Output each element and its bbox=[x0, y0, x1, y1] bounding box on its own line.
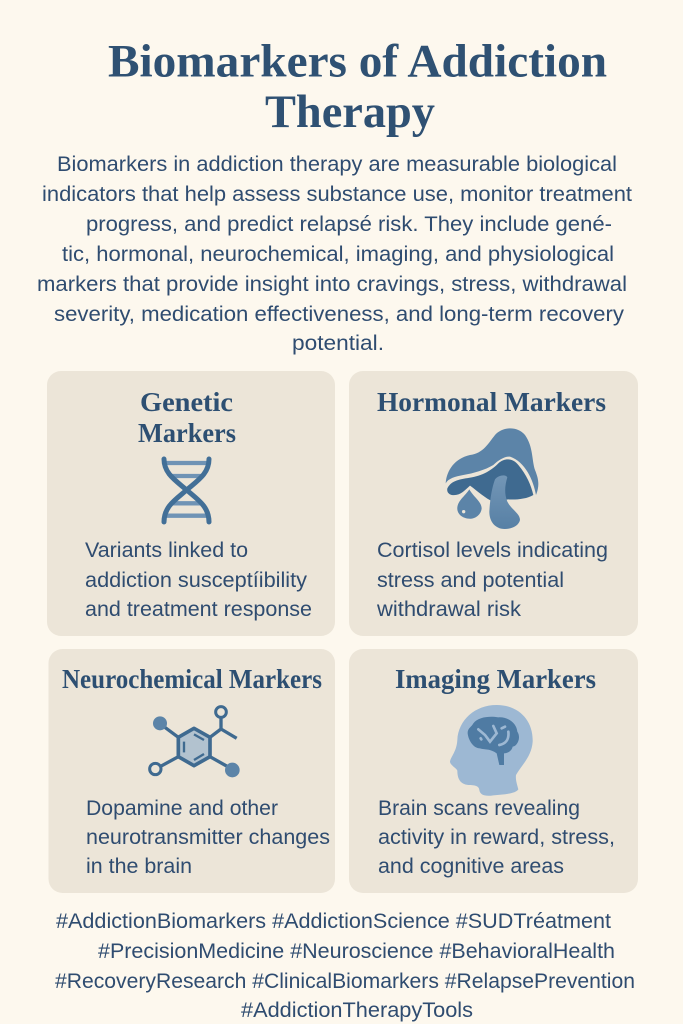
hashtags: #AddictionTherapyTools bbox=[241, 999, 473, 1022]
title: Therapy bbox=[265, 86, 435, 138]
text: imaging description bbox=[378, 797, 615, 878]
intro paragraph: Biomarkers in addiction therapy are measurable biological bbox=[57, 153, 617, 176]
intro paragraph: potential. bbox=[292, 332, 384, 355]
heading: hormonal markers: Hormonal Markers bbox=[377, 387, 606, 417]
title: Biomarkers of Addiction bbox=[108, 36, 607, 88]
text: neurochemical description: Dopamine and other bbox=[86, 797, 278, 820]
icon: head with brain bbox=[450, 705, 533, 796]
text: imaging description: Brain scans revealing bbox=[378, 797, 580, 820]
icon: dna helix bbox=[164, 459, 209, 522]
heading: genetic markers: Markers bbox=[138, 418, 236, 448]
panel: imaging markers bbox=[349, 649, 638, 893]
intro paragraph: indicators that help assess substance use, monitor treatment bbox=[42, 183, 632, 206]
text: genetic description: Variants linked to bbox=[85, 539, 248, 562]
intro paragraph: tic, hormonal, neurochemical, imaging, and physiological bbox=[62, 243, 614, 266]
text: imaging description: and cognitive areas bbox=[378, 855, 564, 878]
intro paragraph: markers that provide insight into cravings, stress, withdrawal bbox=[37, 273, 627, 296]
intro paragraph: severity, medication effectiveness, and long-term recovery bbox=[54, 303, 625, 326]
hashtags: #AddictionBiomarkers #AddictionScience #SUDTréatment bbox=[56, 910, 611, 933]
text: neurochemical description: neurotransmitter changes bbox=[86, 826, 330, 849]
heading: genetic markers: Genetic bbox=[140, 387, 233, 417]
icon: molecule bbox=[150, 707, 240, 777]
text: genetic description: and treatment response bbox=[85, 598, 312, 621]
text: hormonal description: withdrawal risk bbox=[376, 598, 522, 621]
intro paragraph bbox=[37, 153, 632, 355]
hashtags: #RecoveryResearch #ClinicalBiomarkers #RelapsePrevention bbox=[55, 970, 635, 993]
title bbox=[108, 36, 607, 138]
text: genetic description: addiction susceptíibility bbox=[85, 569, 308, 592]
text: neurochemical description bbox=[86, 797, 330, 878]
text: genetic description bbox=[85, 539, 312, 621]
panel: hormonal markers bbox=[349, 371, 638, 636]
icon: endocrine gland with droplet bbox=[446, 428, 538, 529]
hashtags: #PrecisionMedicine #Neuroscience #BehavioralHealth bbox=[98, 940, 615, 963]
text: neurochemical description: in the brain bbox=[86, 855, 192, 878]
text: imaging description: activity in reward, stress, bbox=[378, 826, 615, 849]
panel: neurochemical markers bbox=[48, 649, 335, 893]
heading: imaging markers: Imaging Markers bbox=[395, 664, 596, 694]
text: hormonal description: Cortisol levels indicating bbox=[377, 539, 608, 562]
panel: genetic markers bbox=[47, 371, 335, 636]
text: hormonal description bbox=[376, 539, 608, 621]
heading: neurochemical markers: Neurochemical Markers bbox=[62, 664, 322, 694]
text: hormonal description: stress and potential bbox=[377, 569, 564, 592]
hashtags bbox=[55, 910, 635, 1022]
intro paragraph: progress, and predict relapsé risk. They include gené- bbox=[86, 213, 612, 236]
heading: genetic markers bbox=[138, 387, 236, 448]
